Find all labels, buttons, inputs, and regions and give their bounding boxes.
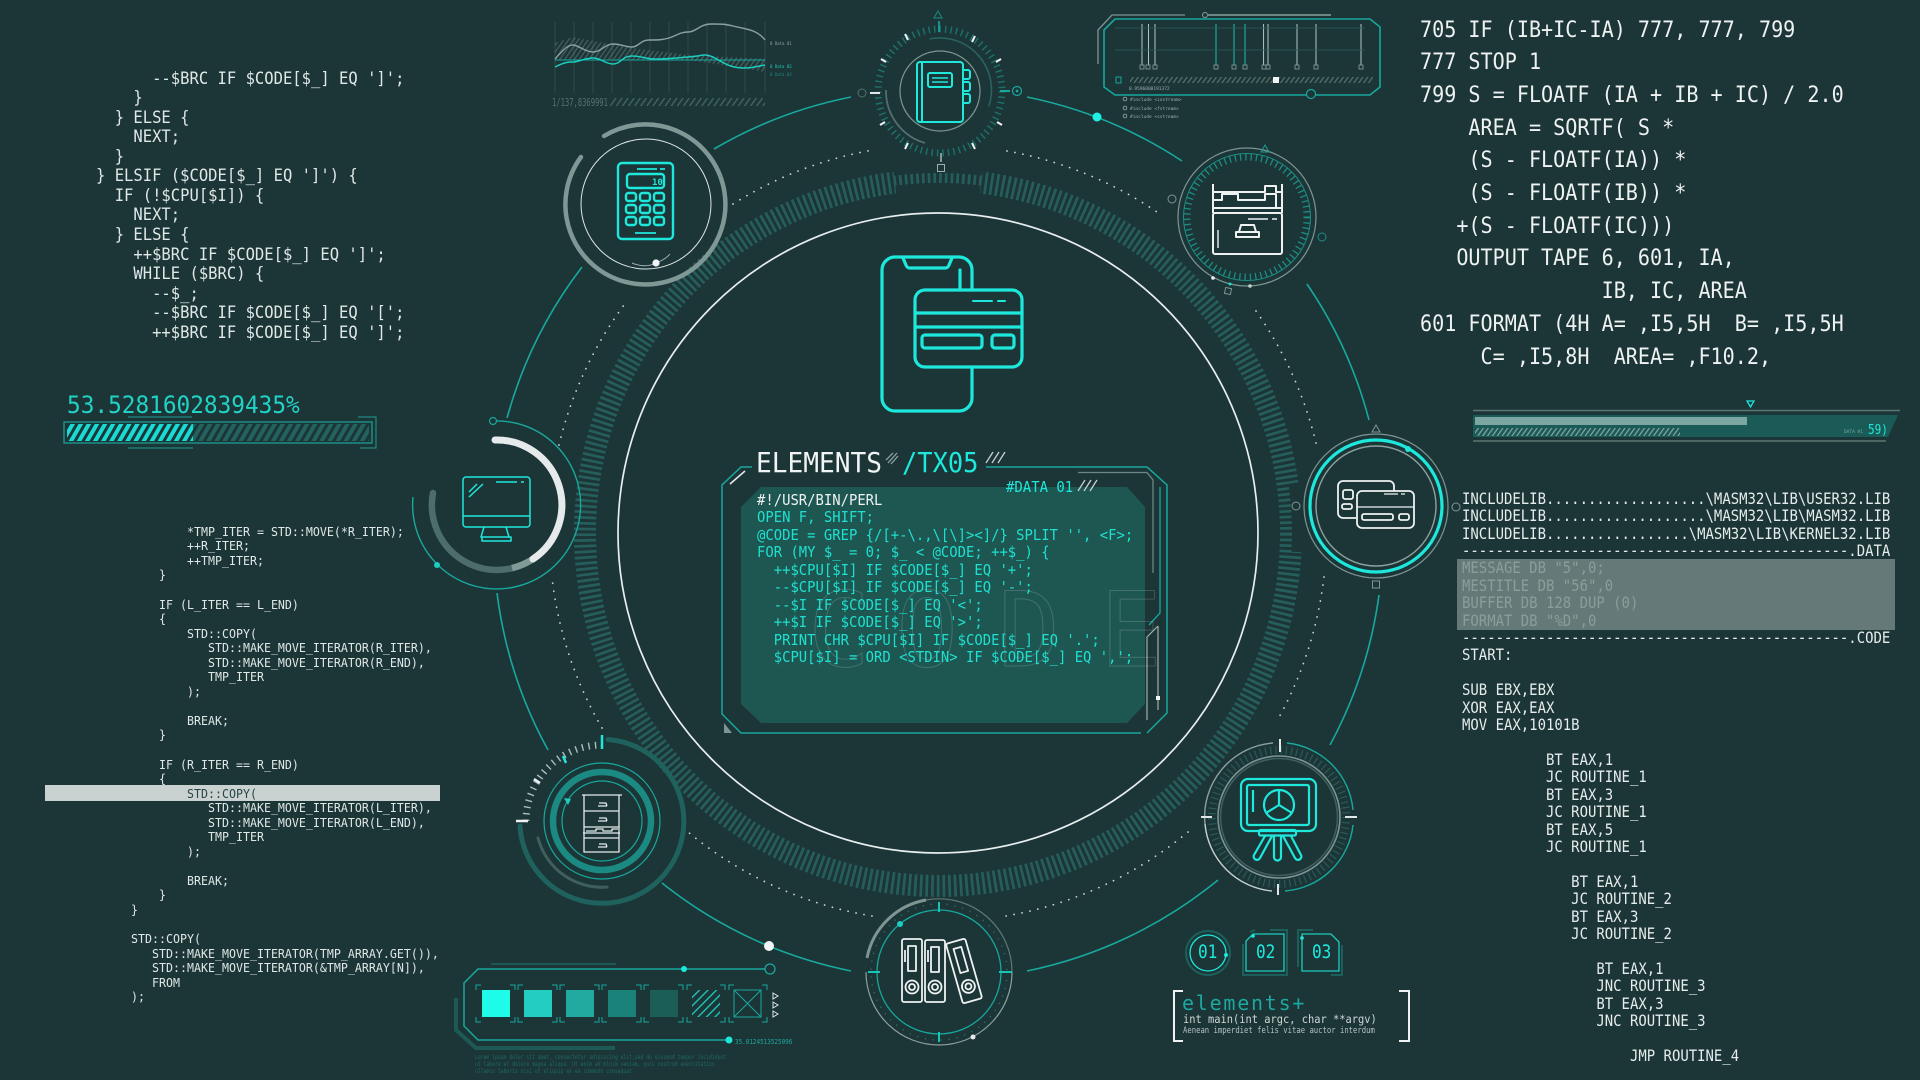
- ghost watermark letters: E: [1100, 571, 1162, 691]
- icon: cabinet glyph: [582, 795, 622, 852]
- satellite: archive box: [1168, 145, 1326, 295]
- title word: tx05: /TX05: [902, 448, 978, 478]
- icon: calculator glyph: [618, 163, 673, 239]
- icon: cards glyph: [1338, 481, 1414, 528]
- icon: calculator glyph: 10: [652, 178, 663, 188]
- right progress band: 59): [1868, 422, 1888, 437]
- swatch value: 35.0124513525096: [735, 1038, 792, 1046]
- top right schematic panel: #include <sstream>: [1130, 114, 1179, 120]
- code block: perl top left: --$BRC IF $CODE[$_] EQ ']'; } } ELSE { NEXT; } } ELSIF ($CODE[$_] EQ ']') { IF (!$CPU[$I]) { NEXT; } ELSE { ++$BRC IF $CODE[$_] EQ ']'; WHILE ($BRC) { --$_; --$BRC IF $CODE[$_] EQ '['; ++$BRC IF $CODE[$_] EQ ']';: [96, 68, 404, 342]
- elements+ caption: Aenean imperdiet felis vitae auctor interdum: [1183, 1026, 1375, 1036]
- ghost watermark letters: D: [998, 571, 1060, 691]
- lorem caption: Lorem ipsum dolor sit amet, consectetur adipiscing elit,sed do eiusmod tempor incididunt ut labore et dolore magna aliqua. Ut enim ad minim veniam, quis nostrud exercitation ullamco laboris nisi ut aliquip ex ea commodo consequat: [475, 1054, 726, 1075]
- center code panel frame: [722, 467, 1167, 733]
- top right schematic panel: #include <fstream>: [1130, 106, 1179, 112]
- top right schematic panel: 0.9596008191372: [1129, 86, 1170, 92]
- code block: fortran top right: 705 IF (IB+IC-IA) 777, 777, 799 777 STOP 1 799 S = FLOATF (IA + IB + IC) / 2.0 AREA = SQRTF( S * (S - FLOATF(IA)) * (S - FLOATF(IB)) * +(S - FLOATF(IC))) OUTPUT TAPE 6, 601, IA, IB, IC, AREA 601 FORMAT (4H A= ,I5,5H B= ,I5,5H C= ,I5,8H AREA= ,F10.2,: [1420, 18, 1844, 370]
- ghost watermark letters: C: [808, 571, 870, 691]
- icon: binders glyph: [902, 938, 982, 1004]
- satellite: file cabinet: [516, 735, 684, 903]
- satellite: credit cards: [1292, 425, 1460, 588]
- line chart: [552, 22, 792, 110]
- badge number 02: 02: [1256, 942, 1275, 963]
- satellite: monitor: [413, 418, 581, 589]
- satellite: notebook: [858, 11, 1022, 172]
- satellite: binders: [866, 899, 1012, 1045]
- numbered badges: [1186, 930, 1342, 975]
- line chart: 0 Data 03: [770, 72, 792, 77]
- icon: notebook glyph: [917, 62, 970, 122]
- notebook markers: [858, 11, 1022, 172]
- progress percentage: 53.5281602839435%: [67, 391, 299, 419]
- elements+ signature: int main(int argc, char **argv): [1183, 1012, 1377, 1026]
- card markers: [1292, 425, 1460, 588]
- triangles: [773, 993, 778, 1017]
- code block: c++ left: *TMP_ITER = STD::MOVE(*R_ITER); ++R_ITER; ++TMP_ITER; } IF (L_ITER == L_END) { STD::COPY( STD::MAKE_MOVE_ITERATOR(R_ITER), STD::MAKE_MOVE_ITERATOR(R_END), TMP_ITER ); BREAK; } IF (R_ITER == R_END) { STD::COPY( STD::MAKE_MOVE_ITERATOR(L_ITER), STD::MAKE_MOVE_ITERATOR(L_END), TMP_ITER ); BREAK; } } STD::COPY( STD::MAKE_MOVE_ITERATOR(TMP_ARRAY.GET()), STD::MAKE_MOVE_ITERATOR(&TMP_ARRAY[N]), FROM );: [131, 524, 439, 1004]
- line chart: 0 Data 02: [770, 64, 792, 69]
- code block: assembly right: INCLUDELIB...................\MASM32\LIB\USER32.LIB INCLUDELIB...................\MASM32\LIB\MASM32.LIB INCLUDELIB.................\MASM32\LIB\KERNEL32.LIB ----------------------------------------------.DATA MESSAGE DB "5",0; MESTITLE DB "56",0 BUFFER DB 128 DUP (0) FORMAT DB "%D",0 ----------------------------------------------.CODE START: SUB EBX,EBX XOR EAX,EAX MOV EAX,10101B BT EAX,1 JC ROUTINE_1 BT EAX,3 JC ROUTINE_1 BT EAX,5 JC ROUTINE_1 BT EAX,1 JC ROUTINE_2 BT EAX,3 JC ROUTINE_2 BT EAX,1 JNC ROUTINE_3 BT EAX,3 JNC ROUTINE_3 JMP ROUTINE_4: [1462, 489, 1890, 1065]
- swatch brackets: [476, 985, 767, 1022]
- icon: phone with credit card: [882, 257, 1022, 411]
- title word: elements: ELEMENTS: [756, 448, 882, 478]
- center panel code: #!/USR/BIN/PERL OPEN F, SHIFT; @CODE = GREP {/[+-\.,\[\]><]/} SPLIT '', <F>; FOR (MY $_ = 0; $_ < @CODE; ++$_) { ++$CPU[$I] IF $CODE[$_] EQ '+'; --$CPU[$I] IF $CODE[$_] EQ '-'; --$I IF $CODE[$_] EQ '<'; ++$I IF $CODE[$_] EQ '>'; PRINT CHR $CPU[$I] IF $CODE[$_] EQ '.'; $CPU[$I] = ORD <STDIN> IF $CODE[$_] EQ ',';: [757, 491, 1133, 666]
- arc node dots: [764, 112, 1102, 951]
- dotted inner arcs: [552, 150, 1324, 916]
- right progress band: DATA #1: [1844, 429, 1863, 435]
- right progress band: [1473, 401, 1900, 441]
- progress bar: [64, 417, 376, 448]
- center panel title: [756, 448, 978, 478]
- badge number 03: 03: [1312, 942, 1331, 963]
- ghost watermark letters: O: [896, 571, 958, 691]
- swatch palette panel: [456, 964, 778, 1048]
- highlight bar: [45, 785, 440, 801]
- top right schematic panel: [1098, 12, 1380, 120]
- archive markers: [1168, 145, 1326, 295]
- central white circle: [618, 213, 1258, 853]
- line chart: 1/137,8369991: [552, 97, 608, 110]
- badge number 01: 01: [1198, 942, 1217, 963]
- satellite: presentation board: [1201, 739, 1357, 895]
- grey highlight box: [1457, 559, 1895, 630]
- tick ring around the central circle: [585, 169, 1298, 886]
- icon: monitor glyph: [463, 477, 530, 541]
- data label: #DATA 01: [1006, 478, 1073, 496]
- icon: archive box glyph: [1213, 184, 1282, 254]
- elements+ heading: elements+: [1182, 991, 1306, 1015]
- connecting teal arcs: [497, 97, 1379, 971]
- hatch marks near title: [886, 452, 1097, 491]
- line chart: 0 Data 01: [770, 41, 792, 46]
- satellite: calculator: [565, 124, 725, 284]
- elements+ brackets: [1174, 991, 1409, 1041]
- icon: presentation glyph: [1241, 779, 1316, 860]
- color swatches: [482, 990, 761, 1017]
- top right schematic panel: #include <iostream>: [1130, 97, 1182, 103]
